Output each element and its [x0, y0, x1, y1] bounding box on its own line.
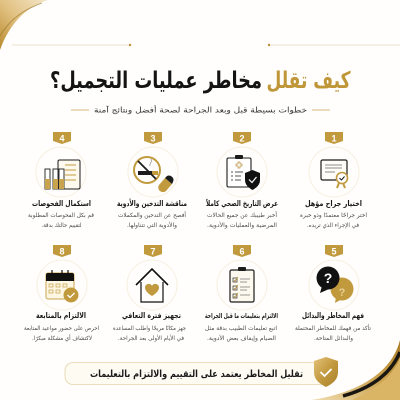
- step 6 description: اتبع تعليمات الطبيب بدقة مثل: [205, 326, 277, 332]
- step 5 card: [295, 245, 371, 342]
- step 2 description: أخبر طبيبك عن جميع الحالات: [207, 211, 277, 219]
- step 6 card: [205, 245, 278, 342]
- step 1 icon: certificate: [309, 147, 359, 197]
- step 4 description: قم بكل الفحوصات المطلوبة: [28, 212, 94, 219]
- step 4 description: لتقييم حالتك بدقة.: [42, 223, 82, 229]
- step 8 badge: 8: [59, 246, 65, 256]
- step 2 description: المرضية والعمليات والأدوية.: [207, 221, 277, 229]
- step 2 description: [207, 211, 277, 229]
- step 5 icon: question speech bubbles: [309, 260, 359, 310]
- step 7 description: في الأيام الأولى بعد الجراحة.: [118, 334, 184, 342]
- step 8 heading: الالتزام بالمتابعة: [36, 311, 86, 320]
- step 1 description: [300, 213, 367, 229]
- step 8 description: احرص على حضور مواعيد المتابعة: [24, 326, 99, 332]
- step 1 heading: اختيار جراح مؤهل: [305, 199, 362, 208]
- step 3 badge: 3: [150, 134, 156, 144]
- step 3 description: [118, 211, 186, 229]
- step 4 heading: استكمال الفحوصات: [32, 199, 91, 208]
- footer callout: [65, 357, 338, 387]
- step 7 card: [113, 245, 186, 342]
- subtitle: خطوات بسيطة قبل وبعد الجراحة لصحة أفضل ونتائج آمنة: [94, 104, 307, 114]
- step 5 heading: فهم المخاطر والبدائل: [302, 311, 364, 320]
- callout text: تقليل المخاطر يعتمد على التقييم والالتزام بالتعليمات: [90, 369, 303, 380]
- step 1 card: [300, 132, 367, 229]
- step 1 description: في الإجراء الذي تريده.: [307, 223, 359, 229]
- decorative header line: right: [268, 44, 400, 46]
- step 6 description: [205, 326, 277, 342]
- step 7 heading: تجهيز فترة التعافي: [122, 311, 181, 320]
- step 7 description: [113, 325, 186, 342]
- step 4 description: [28, 212, 94, 229]
- step 3 card: [117, 132, 187, 229]
- title: مخاطر عمليات التجميل؟: [50, 68, 262, 94]
- step 3 description: أفصح عن التدخين والمكملات: [118, 211, 186, 219]
- decoration: bottom-right gold corner: [312, 340, 400, 400]
- step 6 heading: الالتزام بتعليمات ما قبل الجراحة: [205, 312, 278, 320]
- step 2 heading: عرض التاريخ الصحي كاملاً: [205, 198, 278, 208]
- step 5 icon: question speech bubbles: ?: [324, 270, 332, 286]
- step 4 card: [28, 132, 94, 229]
- step 2 card: [205, 132, 278, 229]
- decoration: top-left gold corner: [0, 0, 48, 50]
- decorative header line: left: [12, 44, 131, 46]
- step 2 icon: medical record and shield: [217, 147, 267, 197]
- step 3 icon: no smoking and capsule: [128, 147, 178, 197]
- step 8 description: [24, 326, 99, 342]
- step 1 description: اختر جراحًا معتمدًا وذو خبرة: [300, 213, 367, 219]
- icon: shield check: [314, 357, 338, 387]
- step 5 description: والبدائل المتاحة.: [314, 336, 353, 342]
- step 4 icon: test tubes and clipboard: [36, 147, 86, 197]
- step 8 card: [24, 245, 99, 342]
- step 5 badge: 5: [331, 246, 337, 256]
- step 5 description: [295, 324, 371, 342]
- step 5 icon: question speech bubbles: ?: [339, 287, 346, 299]
- step 7 icon: home with heart: [127, 260, 177, 310]
- callout pill: [65, 362, 327, 384]
- step 6 description: الصيام وإيقاف بعض الأدوية.: [207, 334, 276, 342]
- step 3 heading: مناقشة التدخين والأدوية: [117, 198, 187, 208]
- step 2 badge: 2: [239, 134, 245, 144]
- title: كيف تقلل: [266, 68, 351, 94]
- step 4 badge: 4: [59, 134, 65, 144]
- step 7 description: جهز مكانًا مريحًا واطلب المساعدة: [113, 325, 186, 332]
- step 6 badge: 6: [239, 246, 245, 256]
- step 1 badge: 1: [331, 134, 337, 144]
- step 3 description: والأدوية التي تتناولها.: [127, 221, 177, 229]
- step 8 description: لاكتشاف أي مشكلة مبكرًا.: [32, 334, 92, 342]
- step 8 icon: calendar with check: [37, 260, 87, 310]
- step 6 icon: checklist clipboard: [217, 260, 267, 310]
- step 7 badge: 7: [150, 246, 156, 256]
- step 5 description: تأكد من فهمك للمخاطر المحتملة: [295, 324, 371, 332]
